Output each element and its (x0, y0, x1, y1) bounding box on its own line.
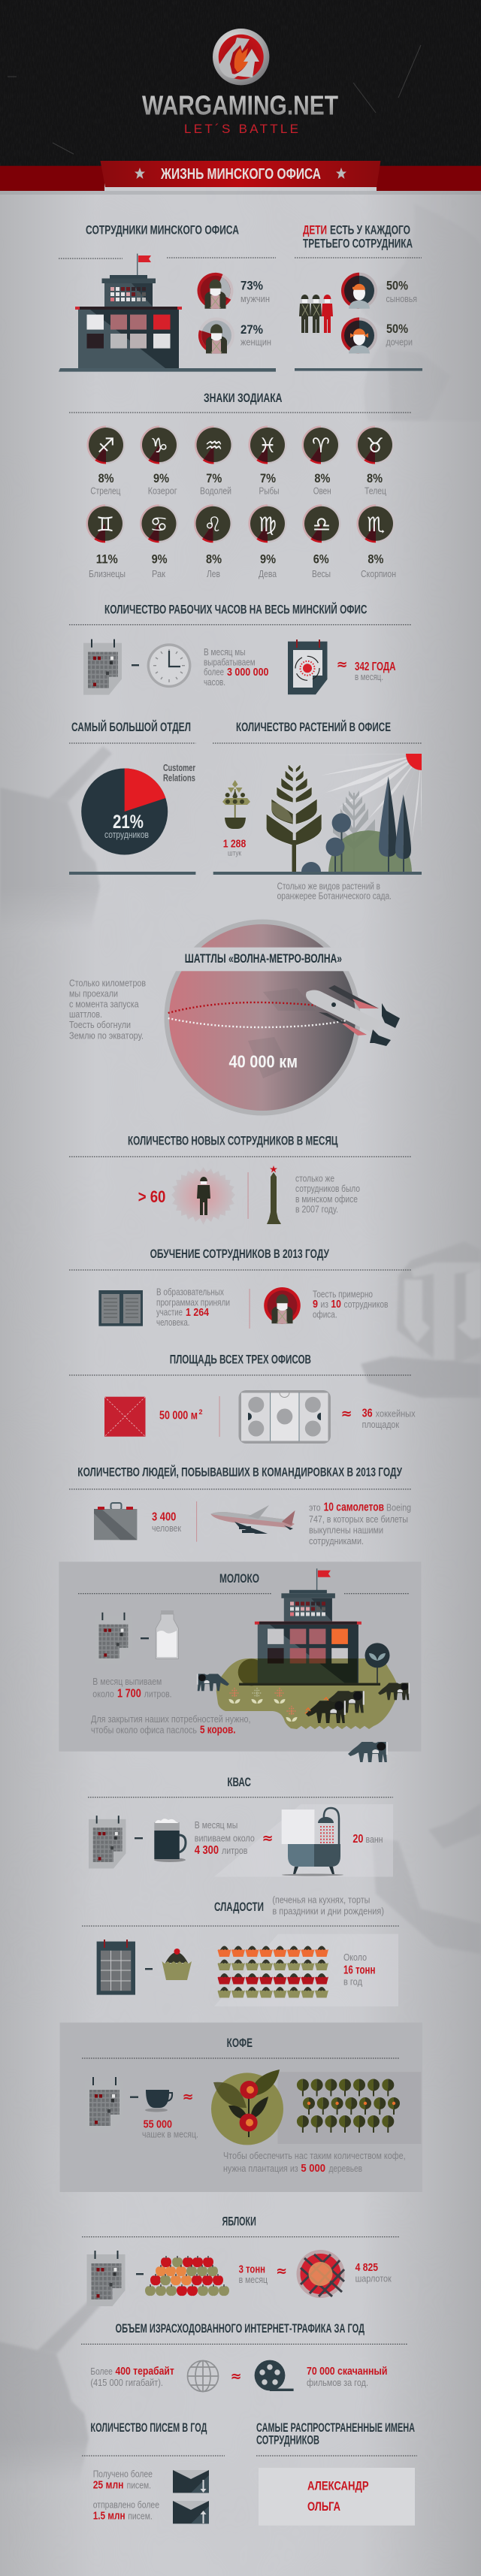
text: boeing note: это (309, 1503, 321, 1513)
text: kvass: випиваем около (195, 1833, 255, 1843)
zodiac: pisces (248, 425, 287, 496)
stat: cups (142, 2119, 198, 2140)
text: shuttle note: с момента запуска (69, 999, 139, 1010)
text: received letters: 25 млн (93, 2480, 123, 2492)
text: boeing note: Boeing (386, 1503, 411, 1513)
note: sweets: (печенья на кухнях, торты (272, 1895, 370, 1906)
stat: sons: сыновья (386, 294, 417, 304)
windows (268, 1629, 284, 1644)
icon: clock (147, 643, 191, 688)
cow: below panel (348, 1742, 388, 1762)
watermark: world of tanks shield (361, 1241, 481, 1398)
text: coffee plantation: 5 000 (301, 2163, 325, 2175)
approx sign: ≈ (262, 1831, 274, 1846)
small plant (222, 780, 250, 829)
text: training count: человека. (156, 1317, 189, 1328)
text: terabytes: Более (90, 2366, 113, 2377)
heading: new employees: КОЛИЧЕСТВО НОВЫХ СОТРУДНИКОВ В МЕСЯЦ (128, 1134, 337, 1147)
zodiac: aquarius: ♒︎ (204, 434, 223, 458)
icon: calendar (95, 1613, 132, 1664)
watermark: tank lower (0, 2298, 101, 2484)
plant count (223, 838, 246, 857)
zodiac: capricorn: 9% (153, 472, 169, 485)
icon: calendar (89, 1816, 126, 1868)
plant count: 1 288 (223, 838, 246, 850)
text: nine of ten: 9 (313, 1299, 318, 1311)
icon: briefcase (94, 1503, 137, 1540)
text: milk: В месяц выпиваем (92, 1677, 162, 1687)
circle: sons (341, 273, 377, 309)
star left (135, 168, 145, 179)
panel: bath (214, 1804, 393, 1877)
heading: children (303, 224, 413, 250)
pie chart: department share (81, 768, 168, 855)
text: training count: 1 264 (186, 1307, 209, 1319)
text: milk: Для закрытия наших потребностей нужно, (91, 1714, 251, 1725)
stat: apple tonnes: в месяц (239, 2275, 268, 2285)
stat: travellers: человек (152, 1523, 181, 1534)
trees: plantation (297, 2079, 400, 2133)
icon: year calendar with sun (288, 639, 328, 694)
stat: pies: шарлоток (355, 2273, 392, 2284)
zodiac: leo: 8% (206, 553, 222, 567)
zodiac: aquarius: Водолей (200, 485, 231, 496)
text: milk (91, 1677, 251, 1736)
text: movies (307, 2366, 388, 2388)
approx sign: ≈ (230, 2369, 242, 2384)
40000 km label: 40 000 км (228, 1052, 298, 1072)
icon: hockey rink (239, 1390, 331, 1444)
zodiac: scorpio: Скорпион (361, 569, 396, 579)
logo: wargaming emblem (213, 29, 269, 85)
label: customer relations (163, 763, 195, 784)
zodiac: virgo: ♍︎ (259, 513, 277, 537)
text: 2007 note: столько же (295, 1174, 334, 1184)
icon: obelisk monument (267, 1166, 281, 1224)
zodiac: sagittarius: 8% (98, 472, 114, 485)
zodiac: gemini: 11% (96, 553, 118, 567)
text: kvass: 4 300 (195, 1844, 219, 1857)
stat: women: женщин (240, 337, 271, 348)
pie chart: department share: сотрудников (104, 830, 149, 840)
heading: biggest department: САМЫЙ БОЛЬШОЙ ОТДЕЛ (71, 720, 191, 734)
text: milk: чтобы около офиса паслось (91, 1725, 197, 1735)
zodiac: aries: Овен (313, 485, 331, 496)
stat: travellers (152, 1510, 181, 1534)
plant count: штук (228, 849, 242, 857)
zodiac: leo: ♌︎ (204, 513, 222, 537)
heading: sweets: СЛАДОСТИ (214, 1900, 264, 1914)
zodiac: capricorn (140, 425, 179, 496)
text: training count (156, 1286, 230, 1328)
heading: staff: СОТРУДНИКИ МИНСКОГО ОФИСА (86, 224, 239, 237)
text: training count: программах приняли (156, 1297, 230, 1308)
zodiac: sagittarius: ♐︎ (97, 434, 115, 458)
zodiac: taurus: 8% (367, 472, 383, 485)
stat: sons (386, 279, 417, 304)
text: shuttle note: Землю по экватору. (69, 1031, 144, 1042)
stat: daughters: 50% (386, 322, 408, 336)
icon: calendar (85, 2077, 123, 2133)
green field (216, 1658, 398, 1729)
zodiac: virgo: 9% (260, 553, 276, 567)
stat: 342 years: 342 ГОДА (355, 661, 396, 673)
zodiac: leo (194, 504, 232, 579)
tower windows (110, 287, 146, 301)
icon: envelope down (173, 2470, 209, 2493)
zodiac: gemini (86, 504, 126, 579)
text: milk: литров. (144, 1689, 172, 1700)
stat: bathtubs: ванн (365, 1834, 383, 1845)
bush (238, 1658, 265, 1686)
stat: cups: чашек в месяц. (142, 2130, 198, 2140)
dome (301, 862, 321, 872)
approx sign: ≈ (337, 657, 348, 673)
text: monthly hours: В месяц мы (204, 647, 246, 658)
logo wordmark: WARGAMING.NET (142, 90, 338, 120)
stat: sweets tonnes: Около (343, 1952, 367, 1963)
text: terabytes (90, 2366, 174, 2388)
stat: daughters (386, 322, 413, 348)
text: boeing note: 10 самолетов (324, 1501, 384, 1514)
zodiac: aquarius: 7% (206, 472, 222, 485)
icon: calendar (87, 2251, 125, 2306)
heading: kvass: КВАС (227, 1776, 251, 1789)
big plant (266, 764, 322, 845)
heading: coffee: КОФЕ (227, 2036, 253, 2050)
text: training count: В образовательных (156, 1286, 225, 1297)
text: training count: участие (156, 1308, 183, 1318)
zodiac: gemini: ♊︎ (96, 513, 114, 537)
zodiac: capricorn: ♑︎ (150, 434, 168, 458)
starburst with soldier (171, 1167, 235, 1225)
figures: three employees (299, 295, 333, 333)
text: shuttle note: шаттлов. (69, 1009, 102, 1020)
name: alexander: АЛЕКСАНДР (307, 2479, 369, 2493)
heading: internet traffic: ОБЪЕМ ИЗРАСХОДОВАННОГО ИНТЕРНЕТ-ТРАФИКА ЗА ГОД (116, 2322, 365, 2336)
cow: front (305, 1701, 346, 1723)
building (255, 1568, 362, 1683)
zodiac: pisces: Рыбы (259, 485, 280, 496)
note: sweets: в праздники и дни рождения) (272, 1906, 384, 1916)
text: botanical garden note (277, 881, 392, 902)
text: kvass: В месяц мы (195, 1820, 237, 1831)
heading: children: ТРЕТЬЕГО СОТРУДНИКА (303, 237, 413, 250)
main windows (87, 315, 104, 330)
dash (145, 1968, 153, 1970)
round tree (365, 1643, 389, 1683)
zodiac: sagittarius (87, 425, 125, 496)
zodiac: sagittarius: Стрелец (90, 485, 120, 496)
stat: area: 2 (198, 1408, 203, 1416)
icon: envelope up (173, 2501, 209, 2523)
zodiac: pisces: ♓︎ (259, 434, 277, 458)
stat: area: 50 000 м (159, 1410, 198, 1423)
cow: far right (378, 1683, 410, 1700)
globe: shuttle distance (162, 920, 400, 1115)
zodiac: cancer: Рак (152, 569, 165, 579)
zodiac: aquarius (195, 425, 233, 496)
text: coffee plantation: Чтобы обеспечить нас таким количеством кофе, (223, 2151, 406, 2161)
heading: letters: КОЛИЧЕСТВО ПИСЕМ В ГОД (90, 2421, 207, 2435)
heading: zodiac: ЗНАКИ ЗОДИАКА (204, 392, 283, 405)
text: coffee plantation: деревьев (329, 2163, 362, 2174)
zodiac: scorpio: 8% (368, 553, 384, 567)
green hill (328, 830, 412, 872)
zodiac: scorpio (356, 504, 396, 579)
zodiac: pisces: 7% (260, 472, 276, 485)
stat: cups: 55 000 (144, 2119, 172, 2131)
stat: pies (355, 2262, 392, 2284)
icon: airplane (210, 1505, 295, 1534)
arrow right (231, 49, 259, 77)
dash (130, 2097, 138, 2098)
text: monthly hours: часов. (204, 677, 225, 688)
text: nine of ten: сотрудников (344, 1299, 389, 1310)
shuttle title: ШАТТЛЫ «ВОЛНА-МЕТРО-ВОЛНА» (185, 952, 342, 966)
shuttle icon (306, 985, 400, 1046)
text: nine of ten (313, 1290, 389, 1320)
zodiac: gemini: Близнецы (89, 569, 126, 579)
icon: kvass mug (154, 1819, 186, 1862)
text: kvass: литров (222, 1846, 248, 1856)
text: monthly hours: вырабатываем (204, 657, 256, 667)
stat: bathtubs: 20 (352, 1833, 363, 1846)
name: olga: ОЛЬГА (307, 2499, 340, 2514)
stat: daughters: дочери (386, 337, 413, 348)
text: monthly hours (204, 647, 269, 688)
text: sent letters: писем. (128, 2511, 153, 2522)
stat: sweets tonnes (343, 1952, 375, 1987)
zodiac: aries: ♈︎ (312, 434, 330, 458)
zodiac: libra: ♎︎ (313, 513, 331, 537)
zodiac: libra: 6% (313, 553, 329, 567)
zodiac: taurus (356, 425, 394, 496)
tower windows (290, 1602, 325, 1616)
heading: working hours: КОЛИЧЕСТВО РАБОЧИХ ЧАСОВ НА ВЕСЬ МИНСКИЙ ОФИС (104, 602, 368, 616)
zodiac: cancer (140, 504, 178, 579)
trees (326, 776, 411, 872)
zodiac: libra (302, 504, 341, 579)
watermark: tank middle (0, 746, 112, 932)
stat: rinks: 36 (362, 1407, 373, 1420)
panel: names (259, 2468, 415, 2526)
watermark: globe lower (372, 1804, 481, 1954)
text: movies: 70 000 скачанный (307, 2366, 388, 2378)
text: nine of ten: 10 (331, 1299, 341, 1311)
text: movies: фильмов за год. (307, 2378, 368, 2388)
zodiac: aries: 8% (314, 472, 331, 485)
text: coffee plantation: нужна плантация из (223, 2163, 298, 2174)
heading: children: ДЕТИ (303, 224, 327, 237)
zodiac: aries (302, 425, 340, 496)
stat: sons: 50% (386, 279, 408, 293)
heading: names: СОТРУДНИКОВ (256, 2433, 319, 2447)
text: coffee plantation (223, 2151, 406, 2175)
heading: names (256, 2421, 415, 2447)
heading: milk: МОЛОКО (219, 1572, 259, 1586)
watermark: globe top (359, 204, 481, 421)
text: shuttle note: Тоесть обогнули (69, 1020, 131, 1030)
label: customer relations: Relations (163, 773, 195, 784)
stat: rinks: хоккейных (376, 1408, 416, 1419)
icon: coffee cup (145, 2090, 172, 2112)
text: boeing note: 747, в которых все билеты (309, 1514, 408, 1525)
cupcake grid (218, 1946, 328, 1997)
text: milk: 5 коров. (200, 1724, 236, 1736)
icon: red square (104, 1397, 146, 1437)
stat: apple tonnes: 3 тонн (239, 2263, 265, 2275)
text: received letters: Получено более (93, 2469, 153, 2479)
text: sent letters: 1.5 млн (93, 2511, 126, 2523)
stat: rinks (362, 1407, 416, 1430)
office building (59, 254, 276, 372)
plantation stripes (277, 2072, 421, 2144)
stat: travellers: 3 400 (152, 1510, 176, 1523)
text: monthly hours: более (204, 667, 224, 678)
big plant highlights (271, 802, 293, 823)
heading: children: ЕСТЬ У КАЖДОГО (330, 224, 410, 237)
text: 2007 note (295, 1174, 360, 1214)
icon: bathtub with shower (282, 1808, 343, 1876)
arrow left (219, 38, 250, 78)
sun rays (318, 754, 422, 842)
note: sweets (272, 1895, 384, 1916)
stat: women (240, 322, 271, 348)
circle: men 73% (197, 273, 233, 309)
text: terabytes: (415 000 гигабайт). (90, 2378, 163, 2388)
heading: office area: ПЛОЩАДЬ ВСЕХ ТРЕХ ОФИСОВ (170, 1353, 311, 1366)
stat: men (240, 279, 270, 304)
grey plant (333, 791, 375, 872)
plants scene (213, 754, 422, 875)
zodiac: scorpio: ♏︎ (367, 513, 385, 537)
approx sign: ≈ (182, 2089, 194, 2105)
text: shuttle note (69, 978, 146, 1042)
approx sign: ≈ (276, 2263, 287, 2279)
text: botanical garden note: Столько же видов растений в (277, 881, 380, 891)
slogan: LET´S BATTLE (184, 122, 298, 136)
stat: more than 60: > 60 (138, 1187, 165, 1206)
approx sign: ≈ (341, 1406, 352, 1422)
pie chart: department share: 21% (113, 812, 144, 833)
text: sent letters: отправлено более (93, 2499, 159, 2510)
stat: pies: 4 825 (355, 2262, 378, 2274)
icon: apple pie (296, 2250, 344, 2298)
text: 2007 note: в минском офисе (295, 1194, 358, 1205)
text: botanical garden note: оранжерее Ботанического сада. (277, 891, 392, 902)
stat: 342 years (355, 661, 396, 682)
flowers (228, 1688, 298, 1722)
text: monthly hours: 3 000 000 (227, 667, 269, 679)
zodiac: taurus: ♉︎ (366, 434, 384, 458)
text: shuttle note: Столько километров (69, 978, 146, 989)
text: boeing note: сотрудниками. (309, 1536, 364, 1547)
stat: rinks: площадок (362, 1420, 399, 1430)
icon: film reel (255, 2360, 294, 2391)
heading: training: ОБУЧЕНИЕ СОТРУДНИКОВ В 2013 ГОДУ (150, 1247, 330, 1261)
banner title: ЖИЗНЬ МИНСКОГО ОФИСА (160, 166, 321, 183)
stat: 342 years: в месяц. (355, 672, 383, 682)
stat: men: мужчин (240, 294, 270, 304)
text: nine of ten: офиса. (313, 1309, 337, 1320)
zodiac: capricorn: Козерог (148, 485, 177, 496)
zodiac: leo: Лев (207, 569, 220, 579)
dash (136, 2273, 144, 2275)
text: shuttle note: мы проехали (69, 989, 118, 999)
text: milk: 1 700 (117, 1688, 141, 1701)
dash (132, 664, 139, 666)
text: received letters: писем. (127, 2481, 151, 2491)
icon: book (98, 1290, 143, 1326)
dash (141, 1637, 149, 1639)
apple pile (145, 2256, 229, 2296)
text: nine of ten: Тоесть примерно (313, 1290, 373, 1300)
stat: women: 27% (240, 322, 263, 337)
text: 2007 note: сотрудников было (295, 1184, 360, 1194)
stat: apple tonnes (239, 2263, 268, 2285)
zodiac: libra: Весы (312, 569, 331, 579)
text: boeing note (309, 1501, 411, 1547)
circle: red soldier (264, 1287, 301, 1324)
icon: big cupcake (162, 1949, 192, 1980)
circle: women 27% (198, 317, 234, 353)
text: boeing note: выкуплены нашими (309, 1525, 383, 1536)
sun (406, 754, 422, 770)
text: milk: около (92, 1689, 114, 1700)
coffee plant (211, 2070, 283, 2145)
stat: sweets tonnes: в год (343, 1976, 363, 1987)
header dark panel (0, 0, 481, 180)
text: received letters (93, 2469, 153, 2492)
zodiac: virgo (248, 504, 287, 579)
text: kvass (195, 1820, 255, 1857)
ribbon banner (0, 161, 481, 195)
zodiac: taurus: Телец (365, 485, 386, 496)
icon: calendar (83, 639, 122, 695)
label: customer relations: Customer (163, 763, 195, 773)
field tint over building (258, 1658, 358, 1683)
stat: men: 73% (240, 279, 263, 293)
zodiac: virgo: Дева (259, 569, 277, 579)
stat: bathtubs (352, 1833, 383, 1846)
circle: daughters (341, 317, 377, 353)
heading: plants: КОЛИЧЕСТВО РАСТЕНИЙ В ОФИСЕ (236, 720, 391, 734)
icon: dark calendar (97, 1940, 135, 1995)
cow: back (323, 1691, 365, 1713)
cow: left (197, 1674, 229, 1691)
panel: sweets backdrop (214, 1934, 398, 2006)
panel: coffee (60, 2023, 422, 2192)
flame (234, 48, 248, 72)
big plant stem (292, 840, 296, 872)
zodiac: cancer: 9% (152, 553, 168, 567)
dash (135, 1837, 143, 1839)
panel: milk (59, 1562, 421, 1752)
text: nine of ten: из (320, 1299, 328, 1310)
icon: milk bottle (156, 1610, 179, 1659)
text: 2007 note: в 2007 году. (295, 1204, 338, 1214)
text: terabytes: 400 терабайт (116, 2366, 174, 2378)
zodiac: cancer: ♋︎ (150, 513, 168, 537)
star right (336, 168, 346, 179)
stat: sweets tonnes: 16 тонн (343, 1964, 375, 1976)
icon: globe (188, 2361, 218, 2391)
heading: apples: ЯБЛОКИ (222, 2215, 256, 2229)
text: sent letters (93, 2499, 159, 2523)
